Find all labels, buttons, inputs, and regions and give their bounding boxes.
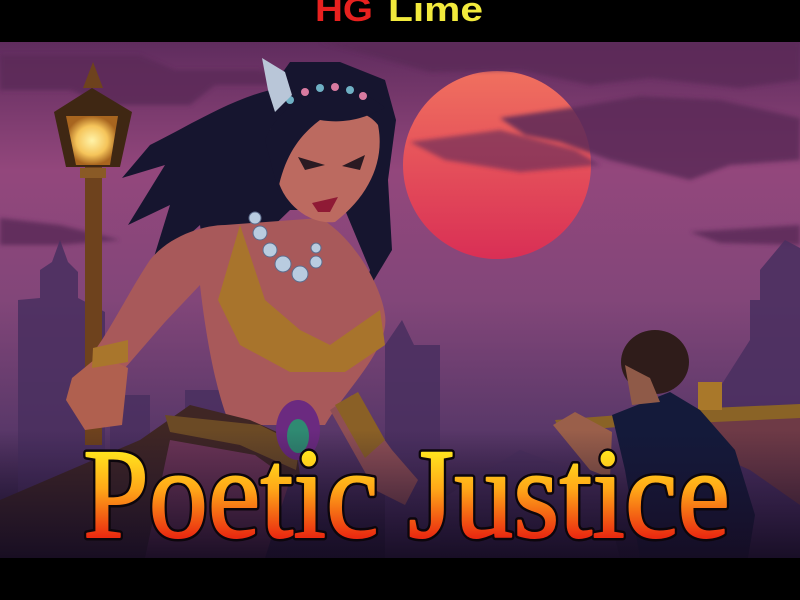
face <box>270 107 380 222</box>
belt and skirt <box>0 405 300 558</box>
logo: HG Lime <box>315 0 483 29</box>
body with wrap clothing <box>95 218 385 425</box>
feather ornament <box>262 58 292 112</box>
gold armlet <box>92 340 128 368</box>
golden top <box>218 225 385 372</box>
eyes and lips <box>298 155 365 170</box>
hair fringe <box>265 90 385 190</box>
icon: red setting sun <box>403 71 591 259</box>
background: city skyline silhouette <box>18 240 800 558</box>
background: dark clouds <box>0 42 800 245</box>
gold bracer <box>335 392 385 458</box>
hair back <box>122 62 396 335</box>
beaded headband <box>286 83 367 104</box>
title: Poetic Justice: Poetic Justice <box>83 423 730 565</box>
arm to the lamp <box>66 355 128 430</box>
character: woman with lamp <box>0 58 418 558</box>
head and hair <box>621 330 689 394</box>
jacket <box>612 392 755 558</box>
top bar <box>0 0 800 42</box>
hand and arm <box>553 412 612 478</box>
pearl necklace <box>249 212 322 282</box>
gem brooch <box>276 400 320 460</box>
title: Poetic Justice: Poetic Justice <box>83 423 730 565</box>
bottom shading <box>0 430 800 558</box>
bottom bar <box>0 558 800 600</box>
sword <box>555 404 800 432</box>
icon: street lamp staff <box>54 62 132 445</box>
arm at right <box>330 395 418 505</box>
character: man with sword <box>553 330 800 558</box>
